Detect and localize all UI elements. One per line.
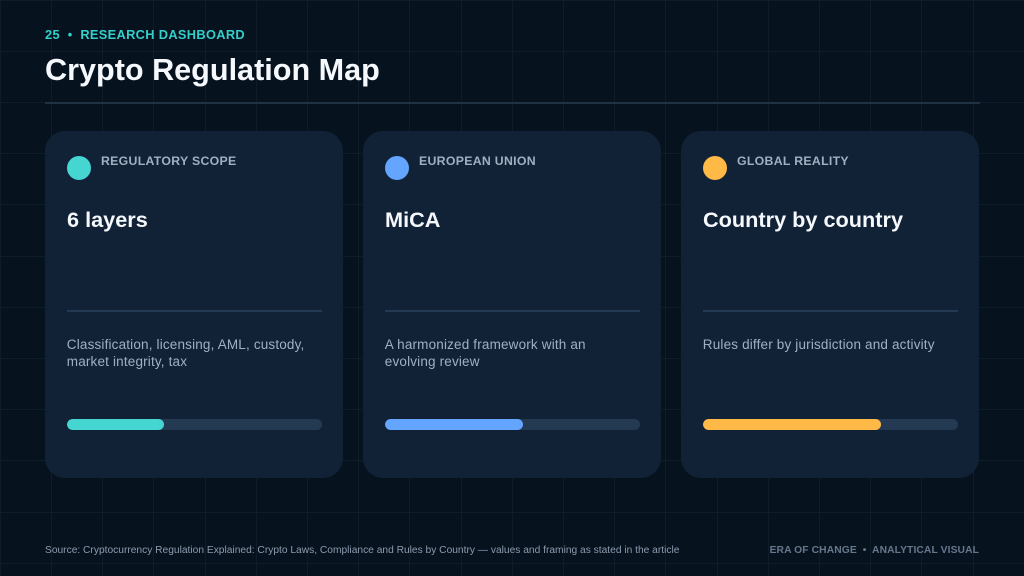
value: country by country: Country by country bbox=[703, 207, 903, 232]
description: european union: A harmonized framework with an bbox=[385, 336, 586, 352]
label: regulatory scope: REGULATORY SCOPE bbox=[101, 154, 237, 168]
header divider bbox=[45, 102, 980, 104]
icon: teal dot bbox=[66, 156, 90, 180]
eyebrow: section number and label: 25 • RESEARCH DASHBOARD bbox=[45, 27, 245, 42]
icon: blue dot bbox=[384, 156, 408, 180]
value: MiCA: MiCA bbox=[385, 207, 440, 232]
panel: regulatory scope bbox=[45, 131, 343, 478]
description: european union: evolving review bbox=[385, 354, 480, 369]
description: regulatory scope bbox=[67, 336, 304, 369]
source note: Source: Cryptocurrency Regulation Explained: Crypto Laws, Compliance and Rules by Country — values and framing as stated in the article bbox=[45, 545, 679, 556]
panel: global reality bbox=[681, 131, 979, 478]
panel: european union bbox=[363, 131, 661, 478]
label: european union: EUROPEAN UNION bbox=[419, 154, 536, 168]
description: regulatory scope: market integrity, tax bbox=[67, 354, 187, 369]
label: global reality: GLOBAL REALITY bbox=[737, 154, 849, 168]
value: 6 layers: 6 layers bbox=[67, 207, 148, 232]
footer brand: ERA OF CHANGE • ANALYTICAL VISUAL bbox=[770, 545, 979, 556]
description: regulatory scope: Classification, licensing, AML, custody, bbox=[67, 336, 304, 352]
title: Crypto Regulation Map bbox=[45, 53, 380, 87]
progress bar: global reality bbox=[702, 419, 958, 430]
progress bar: regulatory scope bbox=[66, 419, 322, 430]
icon: amber dot bbox=[702, 156, 726, 180]
progress bar: european union bbox=[384, 419, 640, 430]
description: european union bbox=[384, 336, 586, 369]
description: global reality: Rules differ by jurisdiction and activity bbox=[703, 336, 935, 352]
